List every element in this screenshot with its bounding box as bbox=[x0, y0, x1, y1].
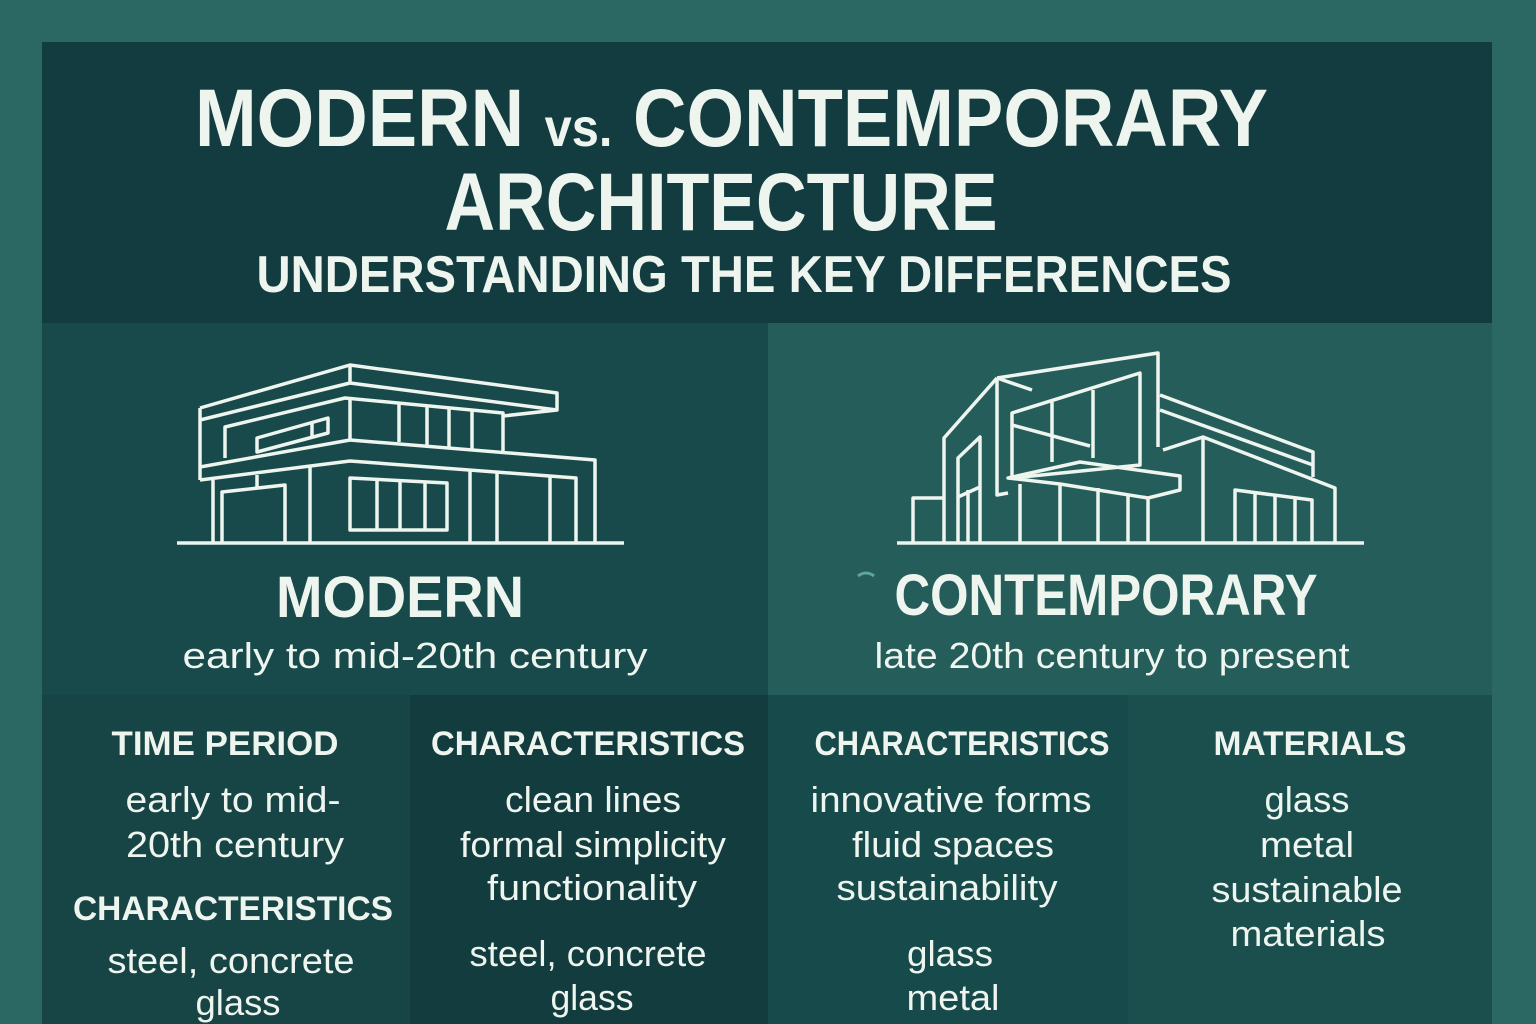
title: ARCHITECTURE bbox=[444, 157, 998, 248]
icon: small dot bbox=[858, 573, 874, 576]
column: time period: TIME PERIOD bbox=[112, 725, 338, 763]
column: modern characteristics: formal simplicity bbox=[460, 824, 726, 865]
column: contemporary characteristics: metal bbox=[906, 977, 1000, 1018]
column: time period: steel, concrete bbox=[108, 940, 354, 981]
column: contemporary characteristics: glass bbox=[907, 933, 993, 974]
column: materials: sustainable bbox=[1212, 869, 1402, 910]
column: contemporary characteristics: fluid spaces bbox=[852, 824, 1054, 865]
panel: contemporary bbox=[768, 323, 1492, 695]
column: contemporary characteristics: CHARACTERISTICS bbox=[814, 725, 1110, 763]
column: time period: early to mid- bbox=[126, 779, 340, 820]
icon: contemporary building bbox=[897, 353, 1364, 543]
column: materials: MATERIALS bbox=[1214, 725, 1406, 763]
title: MODERN vs. CONTEMPORARY bbox=[195, 73, 1268, 164]
subtitle: UNDERSTANDING THE KEY DIFFERENCES bbox=[256, 246, 1232, 304]
column: contemporary characteristics: sustainability bbox=[836, 867, 1058, 908]
column: time period bbox=[42, 695, 410, 1024]
column: modern characteristics: steel, concrete bbox=[470, 933, 706, 974]
column: time period: CHARACTERISTICS bbox=[73, 890, 393, 928]
column: modern characteristics: CHARACTERISTICS bbox=[431, 725, 745, 763]
column: time period: glass bbox=[196, 982, 280, 1023]
column: contemporary characteristics bbox=[768, 695, 1128, 1024]
column: modern characteristics bbox=[410, 695, 768, 1024]
column: materials bbox=[1128, 695, 1492, 1024]
column: modern characteristics: glass bbox=[550, 977, 634, 1018]
column: materials: glass bbox=[1264, 779, 1350, 820]
column: modern characteristics: functionality bbox=[487, 867, 697, 908]
text: modern period: early to mid-20th century bbox=[182, 635, 648, 676]
heading: contemporary: CONTEMPORARY bbox=[894, 563, 1318, 628]
heading: modern: MODERN bbox=[276, 565, 524, 630]
column: materials: materials bbox=[1230, 913, 1386, 954]
title bbox=[195, 73, 1268, 248]
column: materials: metal bbox=[1260, 824, 1354, 865]
icon: modern building bbox=[177, 365, 624, 543]
header band bbox=[42, 42, 1492, 323]
text: contemporary period: late 20th century to present bbox=[874, 635, 1350, 676]
column: modern characteristics: clean lines bbox=[505, 779, 681, 820]
column: time period: 20th century bbox=[126, 824, 344, 865]
panel: modern bbox=[42, 323, 768, 695]
column: contemporary characteristics: innovative forms bbox=[810, 779, 1092, 820]
